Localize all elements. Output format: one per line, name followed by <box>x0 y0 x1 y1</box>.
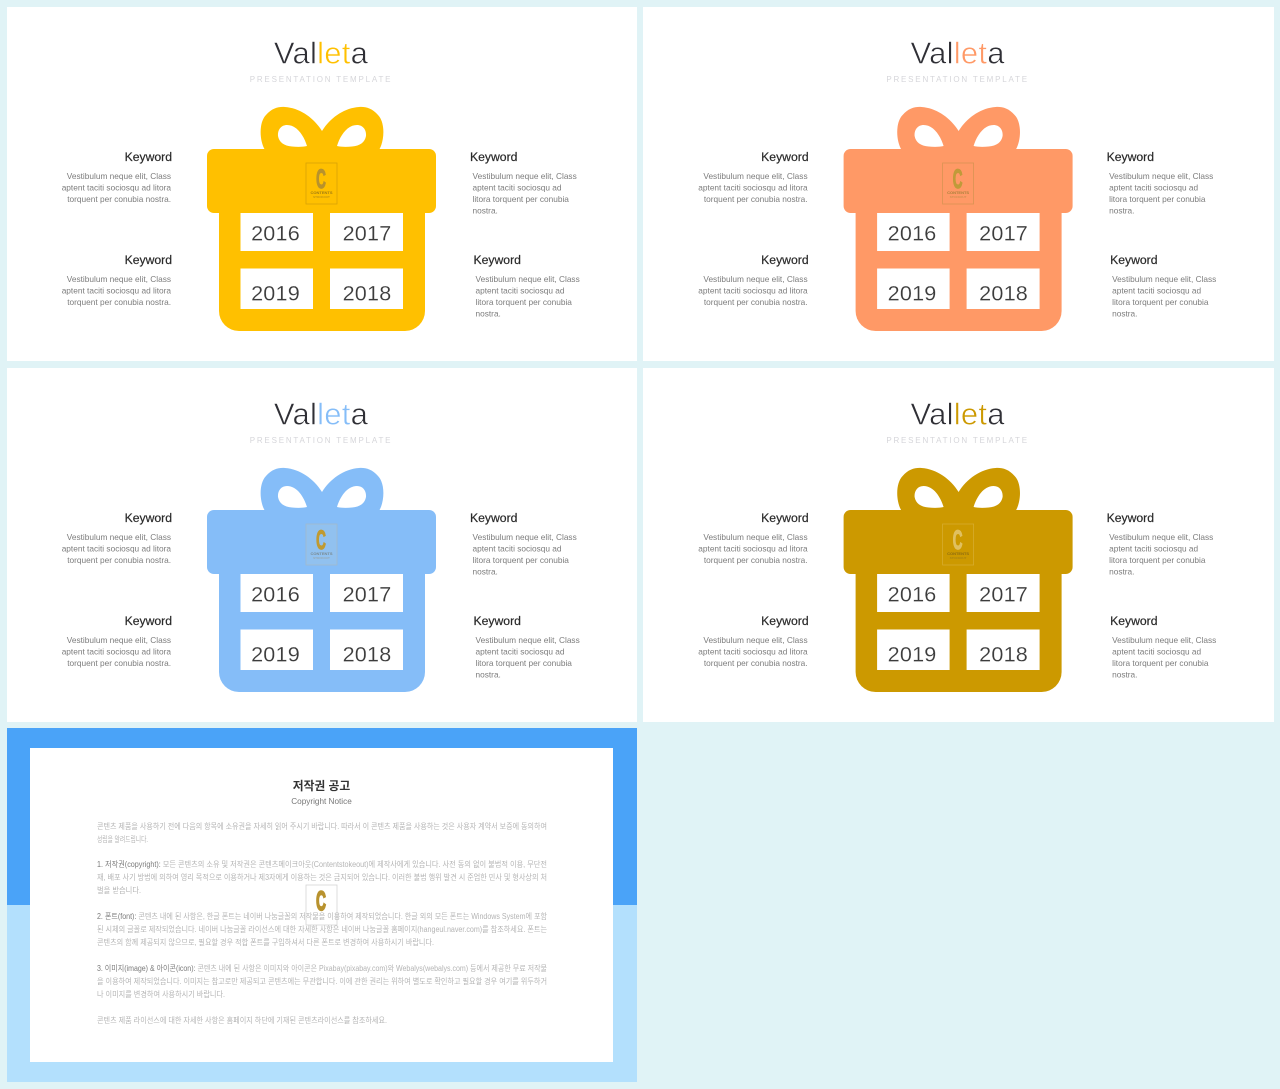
text block: section 1 copyright: 재, 배포 사기 방법에 의하여 영리 목적으로 이용하거나 제3자에게 이용하는 것은 금지되어 있습니다. 이러한 불법 행위 발견 시 준엄한 민사 및 형사상의 처 <box>97 872 547 882</box>
icon: logo watermark <box>306 163 337 204</box>
text block: keyword top right: litora torquent per conubia <box>472 555 569 565</box>
text block: keyword top right: Vestibulum neque elit, Class <box>472 532 577 542</box>
text block: keyword bottom right: nostra. <box>1112 670 1137 680</box>
text block: keyword bottom right: nostra. <box>476 670 501 680</box>
text block: keyword top right: Keyword <box>1107 511 1154 525</box>
text block: keyword top right: Keyword <box>470 150 517 164</box>
text block: keyword bottom right: nostra. <box>1112 308 1137 318</box>
text block: keyword bottom right: aptent taciti sociosqu ad <box>476 646 565 656</box>
icon: gift box: 2017 <box>343 220 391 246</box>
text block: keyword top right <box>470 150 577 216</box>
text block: keyword top right: Vestibulum neque elit, Class <box>1109 532 1213 542</box>
text block: keyword bottom left: torquent per conubia nostra. <box>67 658 171 668</box>
text block: keyword top right: aptent taciti sociosqu ad <box>472 182 562 192</box>
panel: blue gift slide <box>7 368 637 722</box>
text block: keyword bottom right <box>1110 614 1216 680</box>
text block: keyword top left: aptent taciti sociosqu ad litora <box>698 182 808 192</box>
text block: keyword bottom left: Keyword <box>125 614 172 628</box>
title: Valleta <box>910 397 1005 432</box>
icon: gift box <box>844 107 1073 331</box>
text block: keyword top left: Keyword <box>125 511 172 525</box>
text block: keyword top left: Vestibulum neque elit, Class <box>703 171 808 181</box>
icon: gift box: 2016 <box>251 220 300 246</box>
text block: section 3 image and icon: 3. 이미지(image) & 아이콘(icon): 콘텐츠 내에 된 사항은 이미지와 아이콘은 Pixabay(pixabay.com)와 Webalys(webalys.com) 등에서 제공한 무료 저작물 <box>97 963 547 973</box>
icon: logo watermark: C <box>316 164 326 194</box>
icon: logo watermark: C <box>953 525 962 555</box>
text block: keyword bottom right: Vestibulum neque elit, Class <box>476 274 580 284</box>
text block: section 1 copyright: 벌을 받습니다. <box>97 885 141 895</box>
text block: keyword bottom left: Vestibulum neque elit, Class <box>703 635 808 645</box>
text block: keyword bottom left <box>62 253 172 307</box>
text block: keyword top left: Vestibulum neque elit, Class <box>67 532 171 542</box>
text block: keyword bottom left: Keyword <box>761 253 809 267</box>
text block: keyword bottom left <box>698 614 809 668</box>
text block: keyword bottom left: aptent taciti sociosqu ad litora <box>62 286 171 296</box>
text block: keyword bottom right: litora torquent per conubia <box>1112 658 1209 668</box>
text block: keyword bottom left: Vestibulum neque elit, Class <box>67 274 171 284</box>
panel: yellow gift slide <box>7 7 637 361</box>
text block: keyword top left: torquent per conubia nostra. <box>704 555 808 565</box>
icon: logo watermark <box>306 885 337 925</box>
icon: gift box: 2016 <box>888 582 937 606</box>
text block: keyword bottom left: torquent per conubia nostra. <box>704 658 808 668</box>
subtitle: PRESENTATION TEMPLATE <box>886 75 1029 84</box>
text block: introduction: 성립을 알려드립니다. <box>97 834 148 844</box>
icon: gift box: 2017 <box>979 220 1028 246</box>
icon: logo watermark: STOCKOUT <box>950 195 967 199</box>
icon: logo watermark: STOCKOUT <box>313 195 330 199</box>
icon: logo watermark: CONTENTS <box>310 551 333 556</box>
text block: keyword bottom left: aptent taciti sociosqu ad litora <box>698 286 808 296</box>
icon: gift box: 2017 <box>979 582 1028 606</box>
text block: keyword bottom right: Vestibulum neque elit, Class <box>1112 635 1216 645</box>
text block: keyword bottom right: Keyword <box>1110 614 1158 628</box>
text block: keyword top left: torquent per conubia nostra. <box>704 194 808 204</box>
icon: gift box: 2019 <box>251 642 300 666</box>
text block: keyword top right <box>1107 511 1213 576</box>
text block: keyword bottom right: Vestibulum neque elit, Class <box>476 635 580 645</box>
icon: logo watermark: C <box>316 525 326 555</box>
text block: keyword bottom left <box>62 614 172 668</box>
text block: keyword bottom right: Keyword <box>474 253 521 267</box>
icon: logo watermark: CONTENTS <box>947 551 969 556</box>
text block: section 2 font: 콘텐츠의 함께 제공되지 않으므로, 필요할 경우 적합 폰트를 구입하셔서 다른 폰트로 변경하여 사용하시기 바랍니다. <box>97 937 434 947</box>
text block: keyword top left: aptent taciti sociosqu ad litora <box>698 544 808 554</box>
icon: gift box: 2019 <box>888 642 937 666</box>
text block: section 3 image and icon <box>97 963 547 999</box>
panel: copyright notice <box>7 728 637 1082</box>
text block: keyword bottom right <box>474 614 580 680</box>
text block: section 2 font: 된 시체의 글꼴로 제작되었습니다. 네이버 나눔글꼴 라이선스에 대한 자세한 사항은 네이버 나눔글꼴 홈페이지(hangeul.naver.com)를 참조하세요. 폰트는 <box>97 924 547 934</box>
text block: section 3 image and icon: 을 이용하여 제작되었습니다. 이미지는 참고로만 제공되고 콘텐츠에는 무관합니다. 이에 관한 권리는 위하여 별도로 확인하고 필요할 경우 여기를 위두하거 <box>97 976 547 986</box>
text block: keyword top left: Vestibulum neque elit, Class <box>67 171 171 181</box>
text block: keyword bottom left: torquent per conubia nostra. <box>67 297 171 307</box>
text block: keyword top right: Vestibulum neque elit, Class <box>472 171 577 181</box>
text block: keyword bottom left <box>698 253 809 307</box>
icon: gift box: 2018 <box>979 280 1028 306</box>
icon: logo watermark: C <box>953 164 962 194</box>
text block: keyword top right: aptent taciti sociosqu ad <box>1109 544 1199 554</box>
icon: logo watermark: STOCKOUT <box>313 556 330 560</box>
text block: keyword top right: aptent taciti sociosqu ad <box>1109 182 1199 192</box>
icon: gift box: 2019 <box>251 280 300 306</box>
text block: keyword bottom right: aptent taciti sociosqu ad <box>476 286 565 296</box>
icon: logo watermark: CONTENTS <box>310 190 333 195</box>
icon: logo watermark <box>943 524 974 565</box>
text block: keyword bottom right: Vestibulum neque elit, Class <box>1112 274 1216 284</box>
text block: keyword top right: litora torquent per conubia <box>1109 194 1206 204</box>
text block: keyword bottom right: nostra. <box>476 308 501 318</box>
icon: logo watermark: STOCKOUT <box>950 556 967 560</box>
text block: keyword bottom right <box>474 253 580 318</box>
icon: gift box <box>207 468 436 692</box>
text block: keyword top right: nostra. <box>472 566 498 576</box>
text block: section 3 image and icon: 나 이미지를 변경하여 사용하시기 바랍니다. <box>97 989 225 999</box>
panel: dark gold gift slide <box>643 368 1274 722</box>
text block: keyword top left: Keyword <box>125 150 172 164</box>
text block: keyword top right: litora torquent per conubia <box>472 194 569 204</box>
icon: gift box: 2018 <box>979 642 1028 666</box>
text block: keyword bottom right: aptent taciti sociosqu ad <box>1112 286 1202 296</box>
icon: gift box: 2019 <box>888 280 937 306</box>
text block: keyword top left <box>698 150 809 204</box>
text block: section 1 copyright: 1. 저작권(copyright): 모든 콘텐츠의 소유 및 저작권은 콘텐츠메이크아웃(Contentstokeout)에 제작사에게 있습니다. 사전 동의 없이 불법적 이용, 무단전 <box>97 859 547 869</box>
title: Valleta <box>910 36 1005 71</box>
text block: keyword bottom right: Keyword <box>474 614 521 628</box>
heading: copyright subtitle: Copyright Notice <box>291 797 352 806</box>
icon: gift box: 2016 <box>251 582 300 606</box>
text block: keyword top left: aptent taciti sociosqu ad litora <box>62 182 171 192</box>
text block: keyword bottom left: aptent taciti sociosqu ad litora <box>62 646 171 656</box>
heading: copyright title: 저작권 공고 <box>293 779 350 793</box>
text block: keyword bottom left: torquent per conubia nostra. <box>704 297 808 307</box>
text block: keyword bottom left: aptent taciti sociosqu ad litora <box>698 646 808 656</box>
text block: keyword bottom right: litora torquent per conubia <box>476 658 572 668</box>
text block: keyword bottom right: Keyword <box>1110 253 1158 267</box>
icon: gift box: 2017 <box>343 582 391 606</box>
icon: logo watermark: CONTENTS <box>947 190 969 195</box>
text block: keyword top left <box>62 511 172 565</box>
panel: orange gift slide <box>643 7 1274 361</box>
icon: gift box: 2018 <box>343 642 391 666</box>
text block: keyword top right: litora torquent per conubia <box>1109 555 1206 565</box>
text block: keyword bottom left: Keyword <box>125 253 172 267</box>
text block: keyword bottom left: Vestibulum neque elit, Class <box>67 635 171 645</box>
text block: keyword top right <box>1107 150 1213 216</box>
text block: section 2 font <box>97 911 548 947</box>
text block: keyword top left <box>698 511 809 565</box>
text block: section 1 copyright <box>97 859 547 895</box>
text block: keyword top right: Keyword <box>1107 150 1154 164</box>
text block: keyword top left: torquent per conubia nostra. <box>67 194 171 204</box>
text block: keyword top right: Vestibulum neque elit, Class <box>1109 171 1213 181</box>
text block: keyword top left <box>62 150 172 204</box>
text block: keyword top right <box>470 511 577 576</box>
text block: keyword top right: nostra. <box>472 206 498 216</box>
icon: gift box <box>844 468 1073 692</box>
title: Valleta <box>274 397 369 432</box>
text block: keyword top left: Keyword <box>761 150 809 164</box>
title: Valleta <box>274 36 369 71</box>
text block: keyword top left: aptent taciti sociosqu ad litora <box>62 544 171 554</box>
subtitle: PRESENTATION TEMPLATE <box>250 75 392 84</box>
text block: keyword top right: nostra. <box>1109 206 1134 216</box>
icon: logo watermark <box>943 163 974 204</box>
text block: introduction: 콘텐츠 제품을 사용하기 전에 다음의 항목에 소유권을 자세히 읽어 주시기 바랍니다. 따라서 이 콘텐츠 제품을 사용하는 것은 사용자 계약서 보증에 동의하여 <box>97 821 547 831</box>
text block: keyword top left: Keyword <box>761 511 809 525</box>
text block: closing line: 콘텐츠 제품 라이선스에 대한 자세한 사항은 홈페이지 하단에 기재된 콘텐츠라이선스를 참조하세요. <box>97 1015 387 1025</box>
text block: keyword top left: torquent per conubia nostra. <box>67 555 171 565</box>
text block: keyword top right: nostra. <box>1109 566 1134 576</box>
text block: section 2 font: 2. 폰트(font): 콘텐츠 내에 된 사항은, 한글 폰트는 네이버 나눔글꼴의 저작물을 이용하여 제작되었습니다. 한글 외의 모든 폰트는 Windows System에 포함 <box>97 911 548 921</box>
icon: gift box: 2018 <box>343 280 391 306</box>
icon: logo watermark <box>306 524 337 565</box>
text block: introduction <box>97 821 547 844</box>
text block: keyword top right: aptent taciti sociosqu ad <box>472 544 562 554</box>
text block: keyword bottom right: aptent taciti sociosqu ad <box>1112 646 1202 656</box>
subtitle: PRESENTATION TEMPLATE <box>886 436 1029 445</box>
text block: keyword bottom left: Vestibulum neque elit, Class <box>703 274 808 284</box>
subtitle: PRESENTATION TEMPLATE <box>250 436 392 445</box>
text block: keyword bottom right <box>1110 253 1216 318</box>
text block: keyword bottom right: litora torquent per conubia <box>476 297 572 307</box>
icon: gift box <box>207 107 436 331</box>
text block: keyword top right: Keyword <box>470 511 517 525</box>
text block: keyword top left: Vestibulum neque elit, Class <box>703 532 808 542</box>
text block: keyword bottom right: litora torquent per conubia <box>1112 297 1209 307</box>
icon: logo watermark: C <box>316 886 326 916</box>
text block: keyword bottom left: Keyword <box>761 614 809 628</box>
icon: gift box: 2016 <box>888 220 937 246</box>
